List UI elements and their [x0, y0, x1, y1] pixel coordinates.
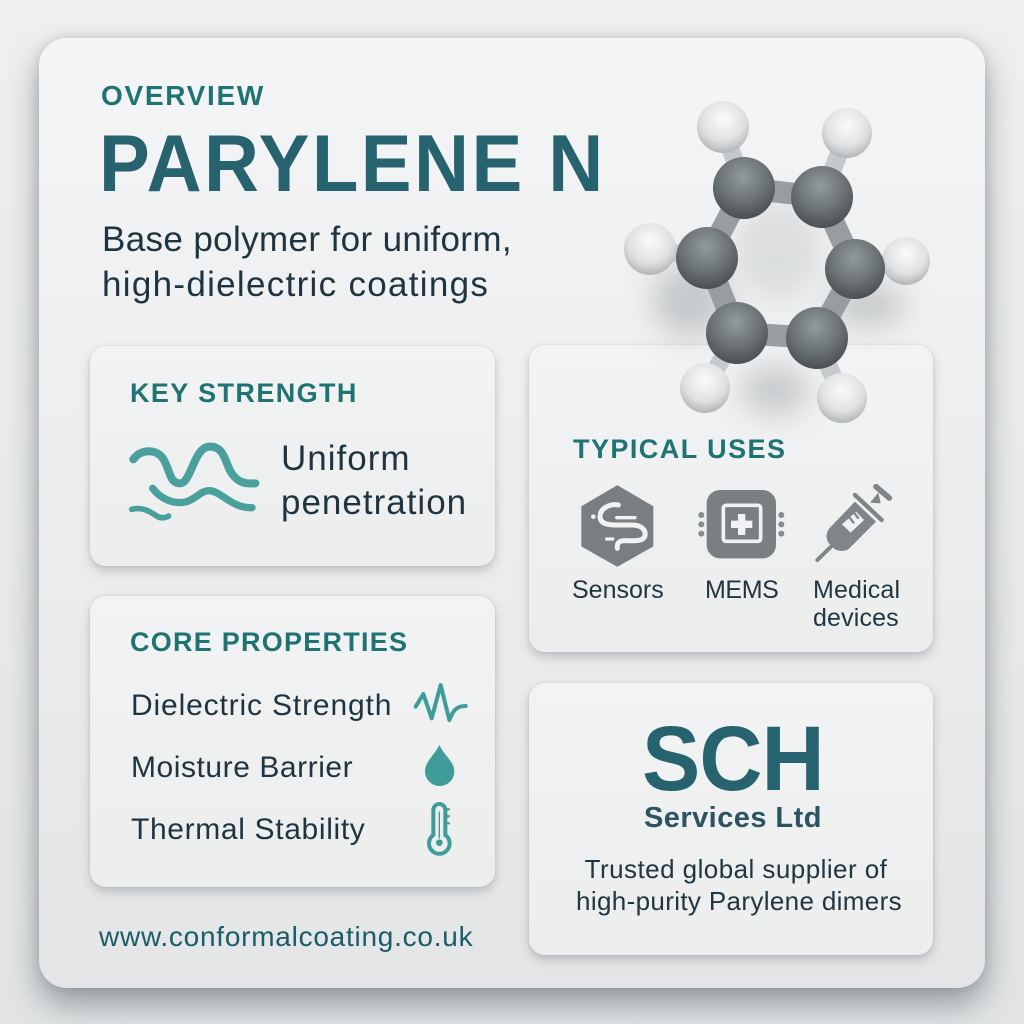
text: uniform penetration — [281, 439, 467, 522]
panel: key strength — [90, 346, 495, 566]
subtitle: Base polymer for uniform, — [102, 220, 512, 259]
icon: pulse — [414, 683, 468, 722]
text: uniform penetration: penetration — [281, 483, 467, 522]
supplier description: high-purity Parylene dimers — [576, 886, 902, 916]
text: dielectric strength: Dielectric Strength — [131, 689, 392, 722]
heading: typical uses: TYPICAL USES — [573, 434, 786, 464]
supplier description: Trusted global supplier of — [585, 854, 887, 884]
label: sensors: Sensors — [572, 576, 664, 604]
label: medical devices — [813, 576, 900, 632]
text: uniform penetration: Uniform — [281, 439, 411, 478]
subtitle: high-dielectric coatings — [102, 265, 489, 304]
label: medical devices: devices — [813, 604, 899, 632]
subtitle — [102, 220, 512, 304]
icons: typical uses — [581, 484, 892, 567]
heading: core properties: CORE PROPERTIES — [130, 627, 408, 657]
panel: core properties — [90, 596, 495, 887]
text: thermal stability: Thermal Stability — [131, 813, 365, 846]
icon: thermometer — [427, 802, 452, 856]
website url: www.conformalcoating.co.uk — [99, 921, 473, 952]
panel: supplier — [529, 683, 933, 955]
heading: key strength: KEY STRENGTH — [130, 378, 358, 408]
icon: water drop — [425, 745, 454, 786]
icon: MEMS chip — [698, 490, 784, 558]
icon: sensors — [582, 486, 653, 566]
icon: syringe — [817, 487, 889, 560]
label: MEMS: MEMS — [705, 576, 778, 604]
text: moisture barrier: Moisture Barrier — [131, 751, 353, 784]
supplier description — [576, 854, 902, 916]
title: PARYLENE N — [99, 119, 606, 209]
logo: SCH: SCH — [642, 708, 824, 810]
overview label: OVERVIEW — [101, 80, 265, 111]
icon: waves — [128, 442, 260, 521]
logo subtitle: Services Ltd — [644, 802, 822, 834]
label: medical devices: Medical — [813, 576, 900, 604]
panel: typical uses — [529, 345, 933, 652]
molecule illustration — [624, 101, 930, 425]
